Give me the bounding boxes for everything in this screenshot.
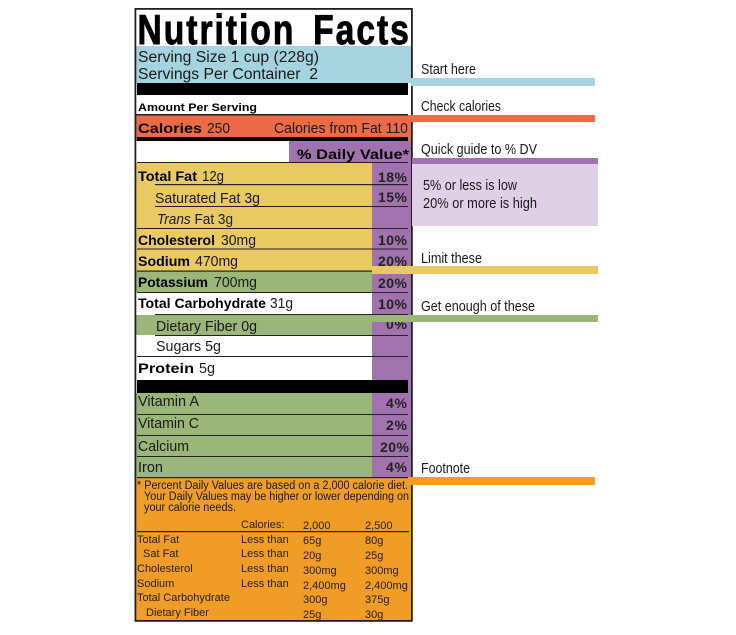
daily values reference table: Sat Fat — [143, 548, 178, 560]
callout: get enough of these — [372, 298, 598, 322]
calories section: 250 — [207, 121, 230, 137]
callout: start here — [411, 61, 595, 86]
protein row — [138, 360, 215, 377]
percentage values: 20% — [378, 275, 408, 291]
callout: quick guide to percent daily value: 20% or more is high — [423, 195, 537, 212]
callout: limit these: Limit these — [421, 250, 482, 267]
percentage values: 4% — [386, 395, 408, 411]
limit these nutrients section: Trans Fat 3g — [157, 212, 233, 228]
daily values reference table: 2,000 — [303, 520, 331, 532]
percentage values: 20% — [380, 439, 410, 455]
serving information section — [136, 46, 412, 83]
limit these nutrients section — [136, 163, 372, 271]
callout: check calories — [408, 98, 595, 122]
limit these nutrients section: 30mg — [221, 233, 256, 249]
total carbohydrate row: Total Carbohydrate — [138, 295, 266, 311]
percentage values: 2% — [386, 417, 408, 433]
daily values reference table: Dietary Fiber — [146, 607, 209, 619]
label background panel — [135, 8, 412, 621]
amount per serving heading: Amount Per Serving — [138, 102, 257, 114]
percentage values — [378, 169, 410, 475]
callout: quick guide to percent daily value: Quick guide to % DV — [421, 141, 537, 158]
footnote text: your calorie needs. — [144, 502, 236, 514]
daily values reference table: Less than — [241, 578, 289, 590]
callout: start here: Start here — [421, 61, 476, 78]
footnote section — [136, 477, 412, 621]
percentage values: 18% — [378, 169, 408, 185]
potassium row: Potassium — [138, 274, 208, 290]
daily values reference table: 65g — [303, 535, 321, 547]
footnote text: * Percent Daily Values are based on a 2,000 calorie diet. — [137, 480, 408, 492]
limit these nutrients section: Sodium — [138, 253, 190, 269]
daily values reference table: 25g — [303, 609, 321, 621]
protein row: 5g — [199, 361, 215, 377]
calories section: Calories from Fat 110 — [274, 121, 408, 137]
daily values reference table — [137, 519, 409, 621]
potassium row: 700mg — [214, 275, 257, 291]
callout: get enough of these: Get enough of these — [421, 298, 535, 315]
calories section — [136, 114, 412, 141]
vitamins and minerals section: Iron — [138, 460, 163, 476]
serving information section: Serving Size 1 cup (228g) — [138, 49, 319, 66]
daily values reference table: Cholesterol — [137, 563, 193, 575]
calories section: Calories — [138, 120, 202, 136]
dietary fiber row — [136, 315, 372, 335]
title: Nutrition Facts — [138, 8, 411, 54]
percentage values: 10% — [378, 296, 408, 312]
callout: quick guide to percent daily value — [412, 141, 598, 226]
footnote text: Your Daily Values may be higher or lower depending on — [144, 491, 409, 503]
sugars row: Sugars 5g — [156, 339, 221, 355]
percentage values: 10% — [378, 232, 408, 248]
percentage values: 4% — [386, 459, 408, 475]
daily values reference table: 20g — [303, 550, 321, 562]
callout: check calories: Check calories — [421, 98, 501, 115]
daily values reference table: Total Carbohydrate — [137, 592, 230, 604]
daily values reference table: Calories: — [241, 519, 284, 531]
vitamins and minerals section — [136, 393, 372, 478]
daily values reference table: 2,400mg — [303, 580, 346, 592]
serving information section: Servings Per Container 2 — [138, 66, 318, 83]
thick black bar — [137, 380, 408, 393]
daily values reference table: Total Fat — [137, 534, 179, 546]
daily values reference table: 300mg — [303, 565, 337, 577]
daily values reference table: 2,500 — [365, 520, 393, 532]
vitamins and minerals section: Vitamin C — [138, 416, 199, 432]
daily values reference table: Sodium — [137, 578, 174, 590]
nutrition label — [134, 8, 413, 622]
daily values reference table: Less than — [241, 548, 289, 560]
limit these nutrients section: Cholesterol — [138, 232, 215, 248]
daily values reference table: 2,400mg — [365, 580, 408, 592]
thick black bar — [137, 83, 408, 95]
limit these nutrients section: Saturated Fat 3g — [155, 191, 260, 207]
callout: footnote: Footnote — [421, 460, 470, 477]
callout: footnote — [408, 460, 595, 485]
dietary fiber row: Dietary Fiber 0g — [156, 319, 257, 335]
daily values reference table: Less than — [241, 534, 289, 546]
daily values reference table: 300g — [303, 594, 327, 606]
percent daily value column — [372, 162, 412, 478]
daily values reference table: 30g — [365, 609, 383, 621]
limit these nutrients section: 470mg — [195, 254, 238, 270]
percent daily value heading: % Daily Value* — [297, 147, 410, 162]
percentage values: 20% — [378, 253, 408, 269]
percent daily value heading — [289, 141, 412, 162]
daily values reference table: 80g — [365, 535, 383, 547]
callout: quick guide to percent daily value: 5% or less is low — [423, 177, 517, 194]
percentage values: 15% — [378, 189, 408, 205]
daily values reference table: 25g — [365, 550, 383, 562]
limit these nutrients section: 12g — [202, 169, 224, 185]
footnote text — [137, 480, 409, 514]
vitamins and minerals section: Vitamin A — [138, 394, 199, 410]
callout: limit these — [372, 250, 598, 274]
daily values reference table: Less than — [241, 563, 289, 575]
potassium row — [136, 271, 372, 292]
protein row: Protein — [138, 360, 194, 376]
vitamins and minerals section: Calcium — [138, 439, 189, 455]
daily values reference table: 300mg — [365, 565, 399, 577]
percentage values: 0% — [386, 316, 408, 332]
daily values reference table: 375g — [365, 594, 389, 606]
limit these nutrients section: Total Fat — [138, 168, 197, 184]
total carbohydrate row: 31g — [270, 296, 293, 312]
